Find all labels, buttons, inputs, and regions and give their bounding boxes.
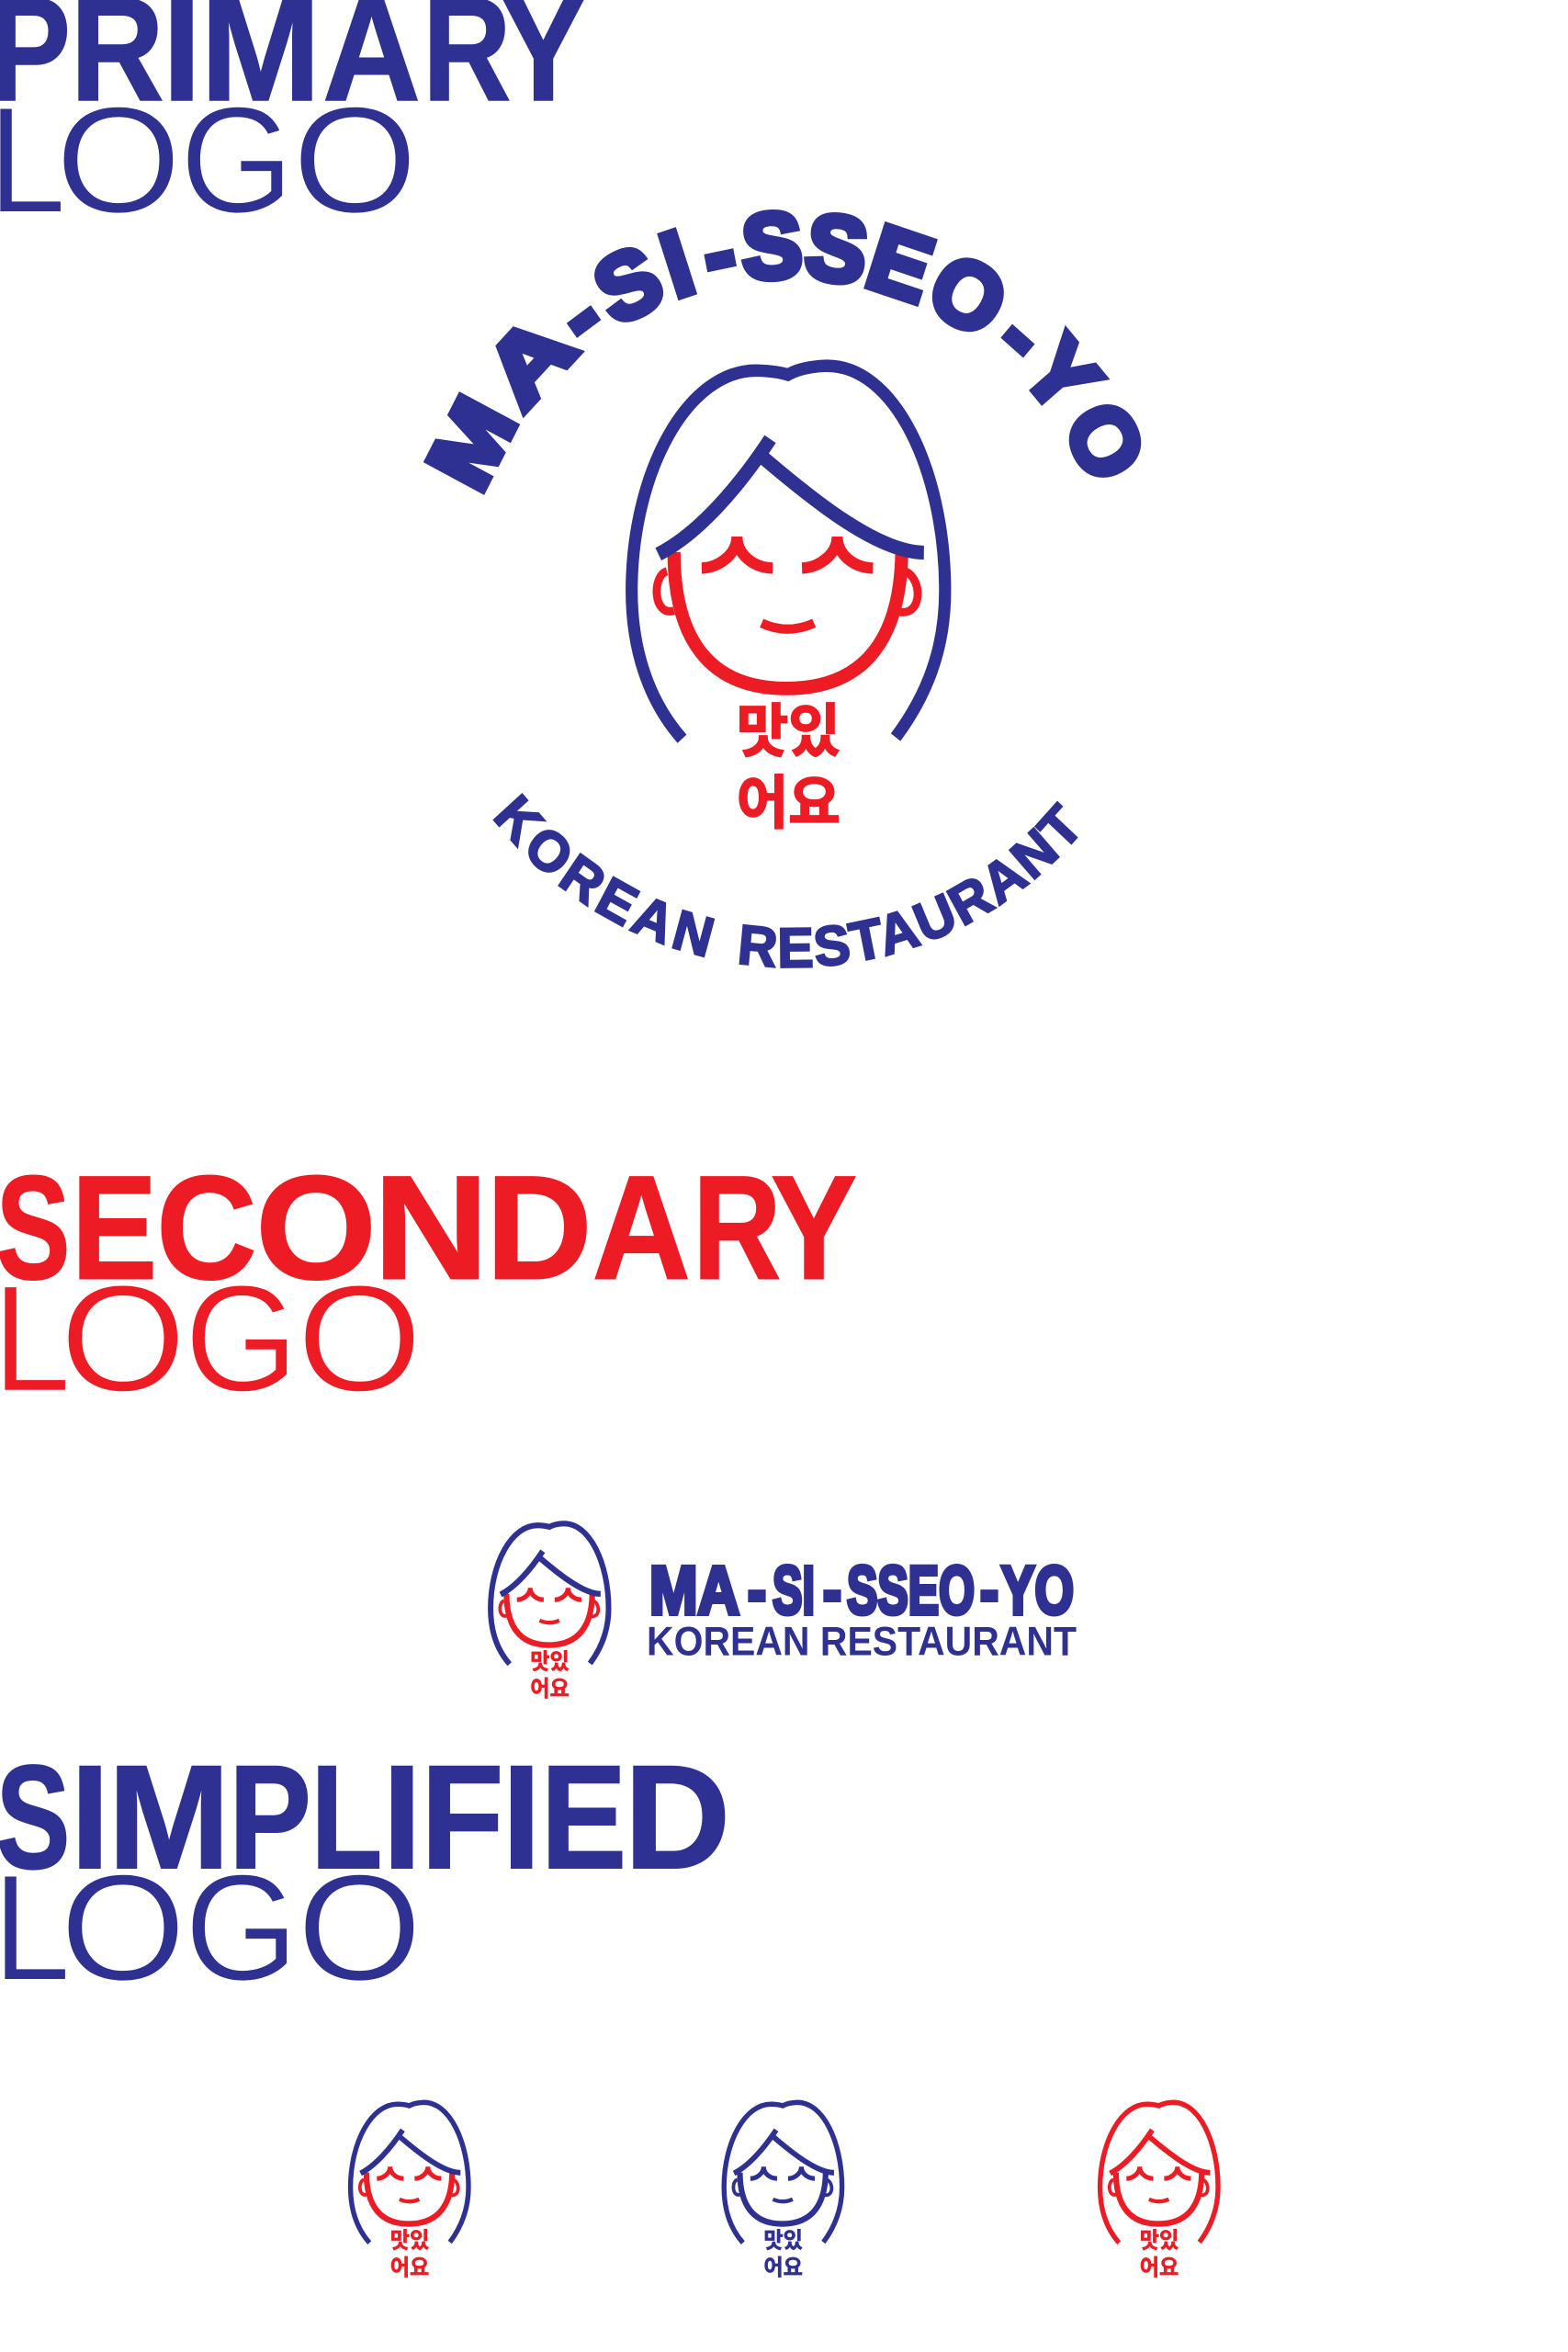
icon: simplified logo, navy [724, 2102, 842, 2279]
icon: small face: 어요 [530, 1676, 570, 1701]
korean wordmark: 맛있 [737, 700, 840, 764]
heading: secondary logo: G [185, 1254, 299, 1423]
heading: simplified logo: F [421, 1735, 504, 1900]
icon: simplified logo, two colour: 맛있 [390, 2228, 429, 2253]
icon: simplified logo, two colour [351, 2102, 468, 2279]
wordmark: MA-SI-SSEO-YO: SSEO [847, 1553, 975, 1628]
icon: face outline [632, 366, 945, 739]
heading: secondary logo [0, 1146, 857, 1423]
icon: simplified logo, navy: 맛있 [763, 2228, 803, 2253]
heading: simplified logo: P [229, 1735, 311, 1900]
heading: simplified logo: L [310, 1735, 382, 1900]
heading: secondary logo: O [297, 1254, 423, 1423]
icon: small face [491, 1523, 609, 1701]
heading: simplified logo: G [185, 1843, 299, 2012]
wordmark: MA-SI-SSEO-YO: YO [1001, 1553, 1074, 1628]
heading: secondary logo: R [693, 1146, 781, 1311]
curved tagline: KOREAN RESTAURANT: KOREAN RESTAURANT [492, 793, 1078, 968]
heading: simplified logo: I [502, 1735, 541, 1900]
heading: secondary logo: Y [771, 1146, 857, 1311]
wordmark: MA-SI-SSEO-YO: MA [649, 1553, 739, 1628]
heading: primary logo: O [292, 75, 418, 244]
korean wordmark [737, 700, 840, 836]
heading: simplified logo: I [382, 1735, 422, 1900]
heading: simplified logo: E [541, 1735, 626, 1900]
heading: secondary logo: O [255, 1146, 377, 1311]
primary logo [423, 209, 1141, 968]
korean wordmark: 어요 [737, 772, 840, 836]
wordmark: MA-SI-SSEO-YO: - [823, 1553, 841, 1628]
heading: simplified logo: D [624, 1735, 730, 1900]
wordmark: MA-SI-SSEO-YO: - [980, 1553, 998, 1628]
secondary logo [491, 1523, 1077, 1701]
heading: secondary logo: A [592, 1146, 691, 1311]
heading: primary logo: G [180, 75, 294, 244]
heading: simplified logo: O [297, 1843, 423, 2012]
heading: secondary logo: E [72, 1146, 157, 1311]
heading: secondary logo: C [156, 1146, 257, 1311]
curved name: MA-SI-SSEO-YO: MA-SI-SSEO-YO [423, 209, 1141, 495]
heading: simplified logo [0, 1735, 730, 2012]
heading: secondary logo: O [60, 1254, 186, 1423]
icon: simplified logo, red: 어요 [1140, 2255, 1179, 2279]
heading: secondary logo: N [373, 1146, 489, 1311]
icon: simplified logo, navy: 어요 [763, 2255, 803, 2279]
tagline: KOREAN RESTAURANT: KOREAN RESTAURANT [647, 1620, 1077, 1665]
heading: simplified logo: I [71, 1735, 109, 1900]
icon: simplified logo, red: 맛있 [1140, 2228, 1179, 2253]
wordmark: MA-SI-SSEO-YO: SI [773, 1553, 815, 1628]
heading: secondary logo: D [486, 1146, 592, 1311]
heading: simplified logo: M [107, 1735, 231, 1900]
wordmark: MA-SI-SSEO-YO: - [748, 1553, 766, 1628]
heading: primary logo: O [55, 75, 182, 244]
icon: small face: 맛있 [530, 1649, 570, 1674]
heading: primary logo [0, 0, 586, 244]
icon: simplified logo, two colour: 어요 [390, 2255, 429, 2279]
heading: simplified logo: O [60, 1843, 186, 2012]
icon: simplified logo, red [1100, 2102, 1218, 2279]
